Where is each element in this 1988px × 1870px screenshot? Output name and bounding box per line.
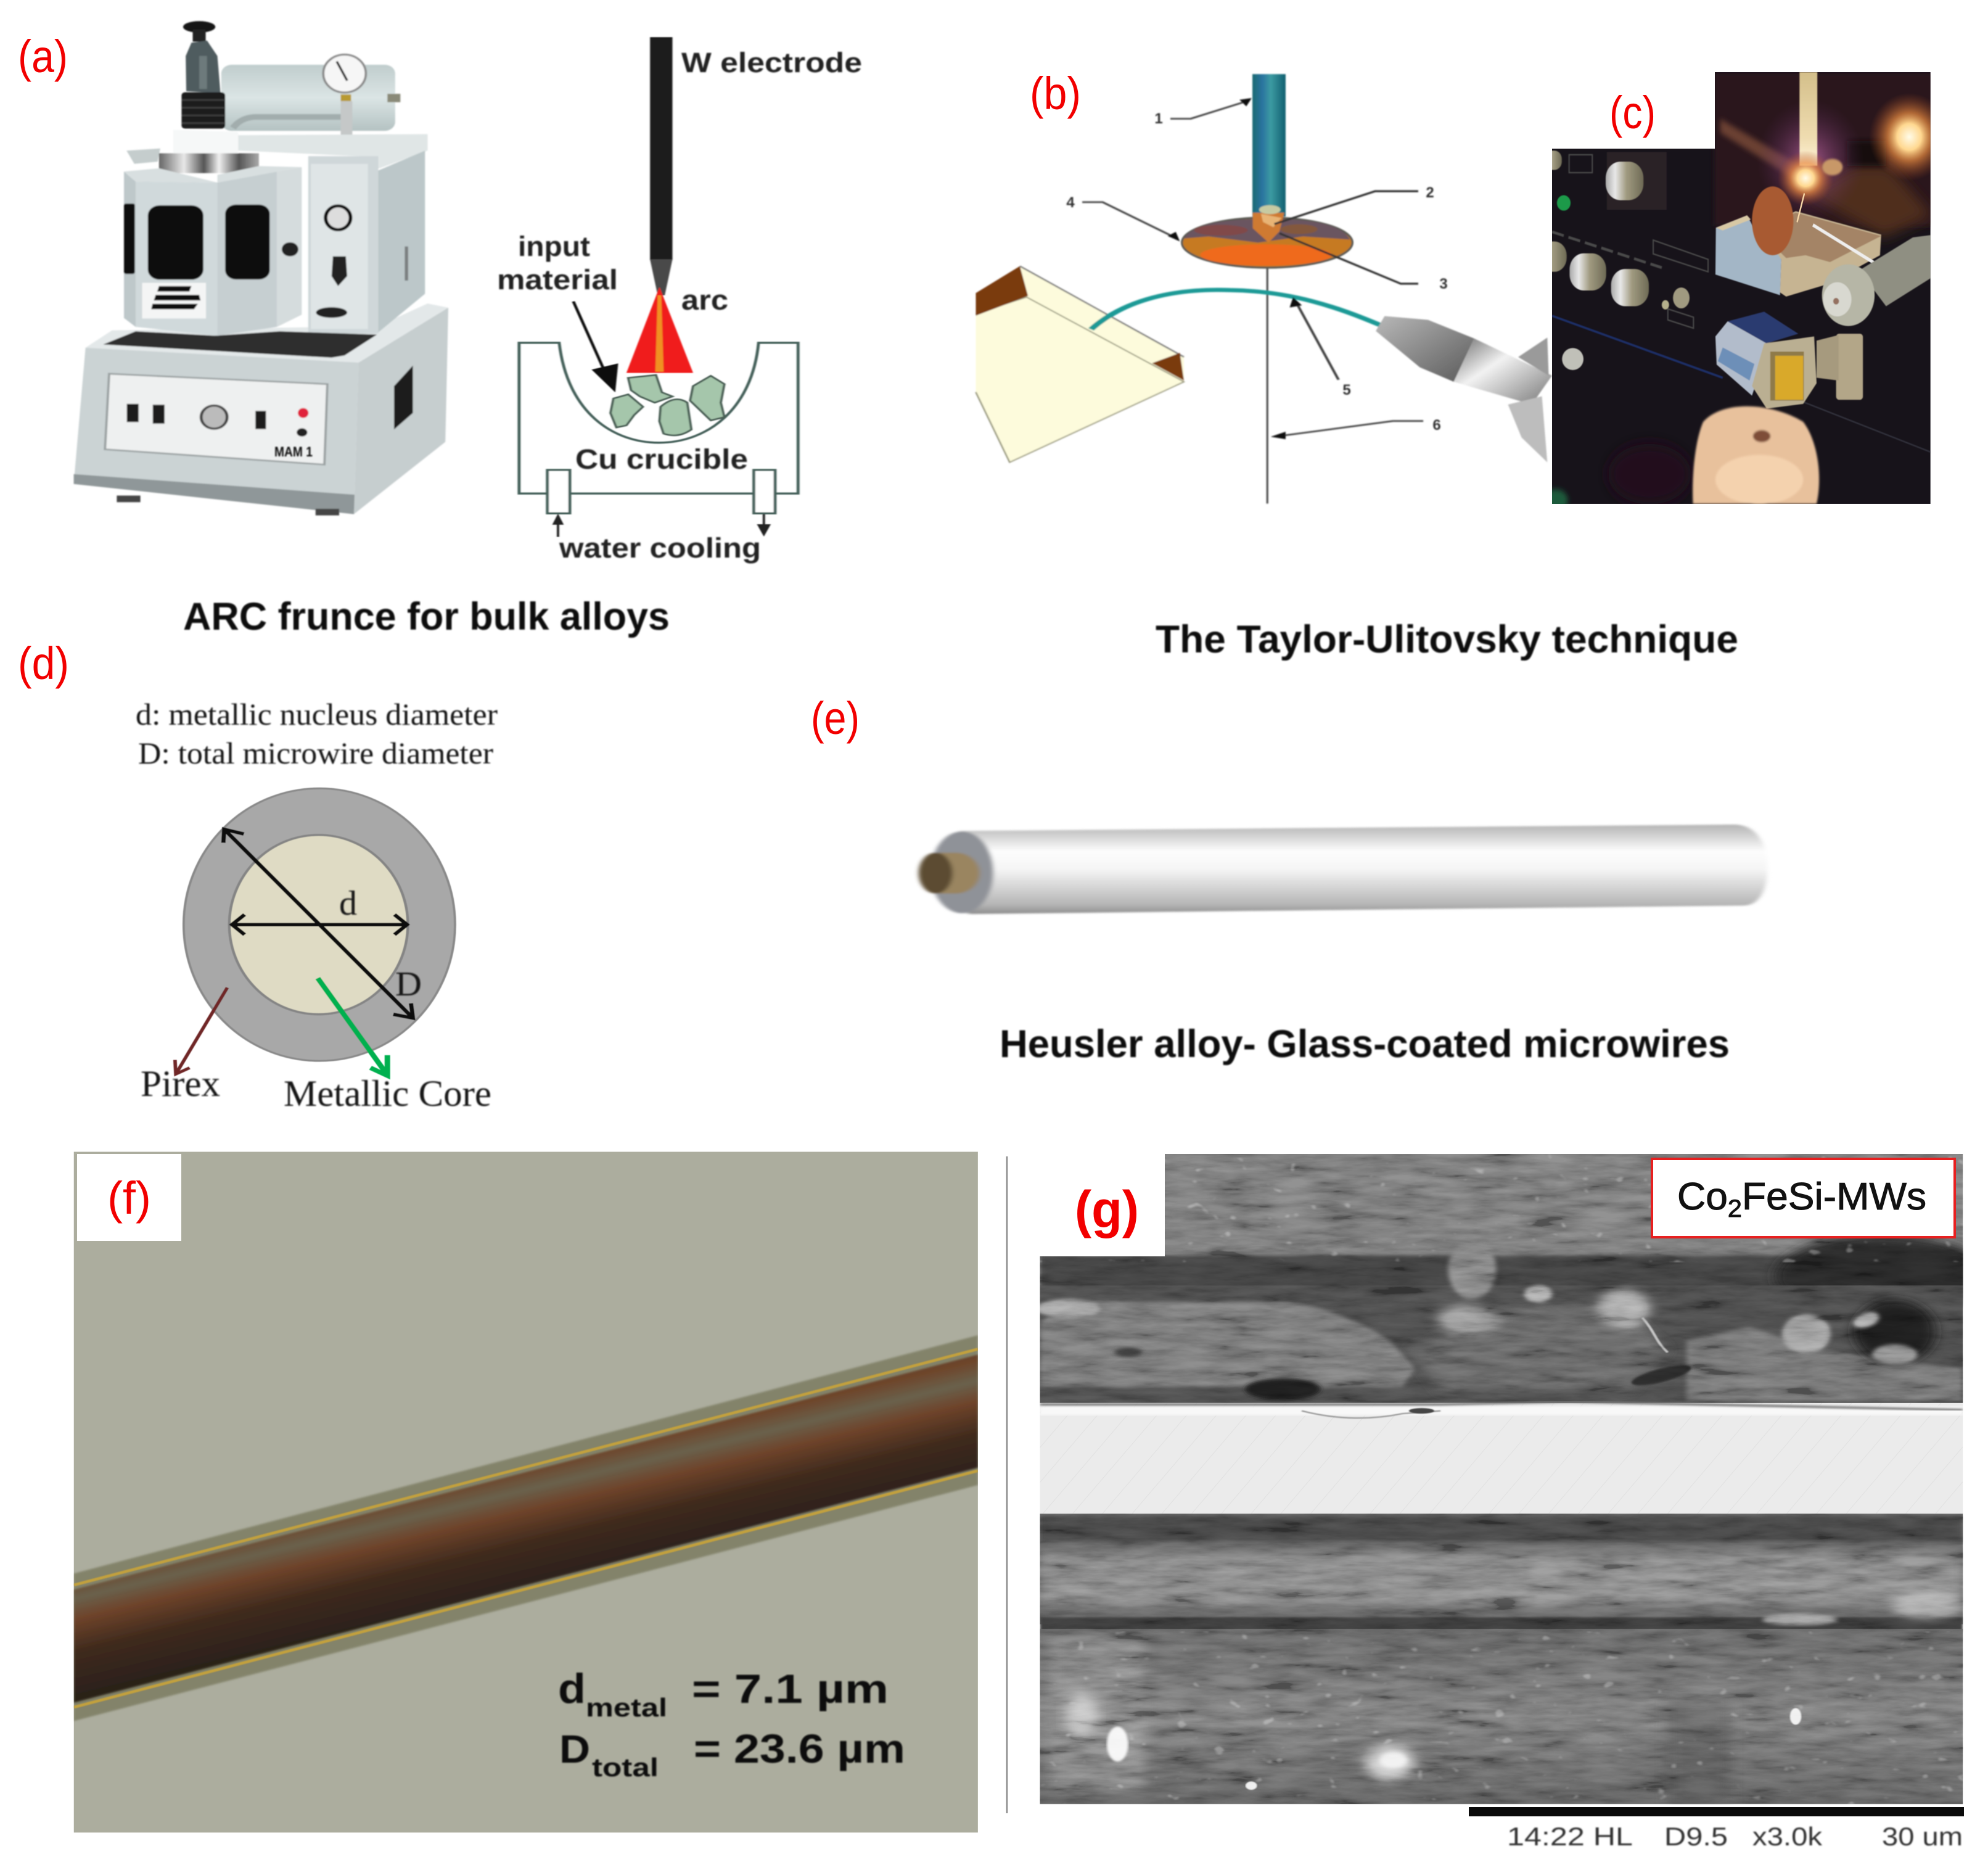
part numbers: 1 bbox=[1154, 110, 1163, 127]
white label box f bbox=[77, 1154, 181, 1241]
SEM metadata bbox=[1507, 1822, 1963, 1851]
heading: Taylor-Ulitovsky: The Taylor-Ulitovsky technique bbox=[1156, 618, 1738, 661]
arc label: arc bbox=[681, 284, 728, 316]
part numbers bbox=[1066, 110, 1448, 434]
SEM metadata: x3.0k bbox=[1752, 1822, 1823, 1851]
machine model label: MAM 1 bbox=[274, 444, 313, 459]
mat bbox=[103, 331, 377, 358]
gauge tube bbox=[233, 94, 352, 145]
SEM metadata: 30 um bbox=[1882, 1822, 1963, 1851]
leader lines 2 and 3 bbox=[1275, 191, 1418, 284]
input material lumps bbox=[610, 375, 725, 435]
part numbers: 4 bbox=[1066, 194, 1075, 211]
molten droplet bbox=[1752, 186, 1793, 255]
top background bbox=[1040, 1154, 1988, 1318]
water channel inlets bbox=[548, 470, 775, 513]
white label box c bbox=[1552, 72, 1715, 149]
roller and shaft bbox=[1822, 234, 1934, 326]
Pirex arrow bbox=[175, 987, 228, 1074]
panel d: microwire cross section bbox=[175, 788, 455, 1076]
panel a: arc furnace machine photo bbox=[74, 21, 448, 516]
chamber bbox=[124, 166, 302, 336]
panel label (e): (e) bbox=[811, 693, 860, 744]
legend: diameter definitions: D: total microwire diameter bbox=[138, 736, 493, 770]
input material label: material bbox=[497, 264, 618, 295]
sample label box: 2 bbox=[1728, 1195, 1742, 1222]
electrode label: W electrode bbox=[681, 47, 862, 78]
scale bar bbox=[1469, 1807, 1964, 1851]
input material arrow bbox=[573, 302, 618, 392]
pressure gauge bbox=[323, 55, 366, 93]
sample label box: FeSi-MWs bbox=[1742, 1176, 1926, 1218]
cross section labels: Pirex bbox=[141, 1063, 220, 1104]
sample label box: Co bbox=[1677, 1176, 1726, 1218]
bottom background bbox=[1040, 1629, 1963, 1804]
control panel bbox=[105, 374, 327, 464]
cross section labels: D bbox=[395, 965, 422, 1003]
panel f: optical micrograph bbox=[74, 1151, 978, 1832]
red arc cone bbox=[626, 287, 693, 373]
top plate bbox=[126, 130, 427, 173]
panel a: arc schematic bbox=[519, 37, 798, 537]
instrument panel details bbox=[1543, 152, 1934, 511]
bright metallic wire bbox=[1040, 1402, 1963, 1514]
cylinder end face bbox=[930, 831, 993, 913]
electrode handle bbox=[181, 21, 225, 129]
panel e: glass-coated microwire model bbox=[919, 825, 1767, 914]
cross section labels: d bbox=[339, 884, 357, 923]
legend: diameter definitions: d: metallic nucleus diameter bbox=[136, 697, 498, 731]
part numbers: 3 bbox=[1439, 276, 1448, 292]
right instrument body bbox=[308, 150, 425, 334]
input material label bbox=[497, 231, 618, 295]
heading: arc furnace: ARC frunce for bulk alloys bbox=[183, 595, 670, 638]
vertical microwire bbox=[1267, 268, 1268, 504]
golden edges bbox=[74, 1349, 978, 1707]
panel g: SEM micrograph bbox=[1037, 1154, 1988, 1804]
panel c: photograph of microwire drawing bbox=[1552, 72, 1931, 504]
logo plate bbox=[142, 283, 206, 318]
glass shell of wire bbox=[74, 1335, 978, 1721]
furnace base bbox=[74, 303, 448, 516]
metal core of wire bbox=[74, 1354, 978, 1703]
cross section labels bbox=[141, 884, 491, 1114]
panel label (f): (f) bbox=[107, 1172, 151, 1224]
panel b: Taylor-Ulitovsky schematic bbox=[976, 74, 1552, 504]
tungsten electrode bbox=[650, 37, 673, 295]
SEM metadata: D9.5 bbox=[1664, 1822, 1728, 1851]
hot melt zone bbox=[1778, 72, 1842, 222]
metal diameter bbox=[558, 1665, 889, 1722]
glass coating bbox=[184, 788, 455, 1061]
panel label (a): (a) bbox=[18, 31, 68, 82]
D arrow bbox=[223, 830, 413, 1018]
feed nozzle bbox=[1376, 316, 1552, 463]
part numbers: 5 bbox=[1342, 382, 1351, 398]
panel label (g): (g) bbox=[1075, 1180, 1139, 1238]
white label box g bbox=[1040, 1154, 1165, 1256]
input material label: input bbox=[518, 231, 590, 262]
glass tube bbox=[1252, 74, 1286, 216]
metallic core arrow bbox=[318, 978, 387, 1076]
leader arrows 1, 4, 5, 6 bbox=[1082, 98, 1423, 439]
water cooling label: water cooling bbox=[559, 532, 761, 564]
crucible tray bbox=[1715, 211, 1881, 297]
total diameter: total bbox=[592, 1753, 659, 1782]
gas cylinder bbox=[221, 65, 395, 131]
panel label (b): (b) bbox=[1030, 68, 1081, 119]
inductor and droplet bbox=[1182, 191, 1418, 284]
wire guide bbox=[1813, 225, 1874, 263]
metal diameter: = 7.1 µm bbox=[692, 1666, 889, 1711]
spool bbox=[976, 266, 1184, 463]
part numbers: 2 bbox=[1426, 184, 1434, 201]
far lamp glow bbox=[1871, 95, 1931, 179]
metal core bbox=[919, 852, 980, 894]
upper band bbox=[1037, 1239, 1963, 1403]
hand bbox=[1693, 406, 1819, 505]
feed cone bbox=[1253, 205, 1284, 242]
warm background bbox=[1714, 72, 1934, 237]
panel label (d): (d) bbox=[18, 638, 69, 689]
part numbers: 6 bbox=[1432, 417, 1441, 434]
heading: Heusler microwires: Heusler alloy- Glass-coated microwires bbox=[1000, 1023, 1730, 1066]
feed wire bbox=[1091, 290, 1381, 329]
metal diameter: metal bbox=[586, 1693, 667, 1722]
total diameter: = 23.6 µm bbox=[694, 1726, 905, 1771]
winding spool bbox=[1715, 311, 1863, 409]
water cooling arrows bbox=[552, 514, 770, 537]
SEM metadata: 14:22 HL bbox=[1507, 1822, 1633, 1851]
control knobs bbox=[1552, 150, 1690, 371]
surface texture bbox=[1040, 1154, 1963, 1804]
metal diameter: d bbox=[558, 1665, 586, 1712]
metallic core bbox=[229, 835, 408, 1015]
panel label (c): (c) bbox=[1609, 87, 1656, 138]
legend: diameter definitions bbox=[136, 697, 498, 770]
cross section labels: Metallic Core bbox=[284, 1073, 491, 1114]
total diameter bbox=[559, 1726, 905, 1782]
copper crucible outline bbox=[519, 343, 798, 493]
total diameter: D bbox=[559, 1727, 590, 1771]
lower band bbox=[1040, 1514, 1963, 1632]
schematic labels bbox=[497, 47, 862, 564]
d arrow bbox=[232, 915, 407, 935]
wire measurements bbox=[558, 1665, 905, 1782]
glass cylinder bbox=[959, 825, 1767, 914]
sample label box bbox=[1652, 1159, 1955, 1237]
furnace upper assembly bbox=[103, 21, 427, 358]
crucible label: Cu crucible bbox=[575, 443, 748, 475]
